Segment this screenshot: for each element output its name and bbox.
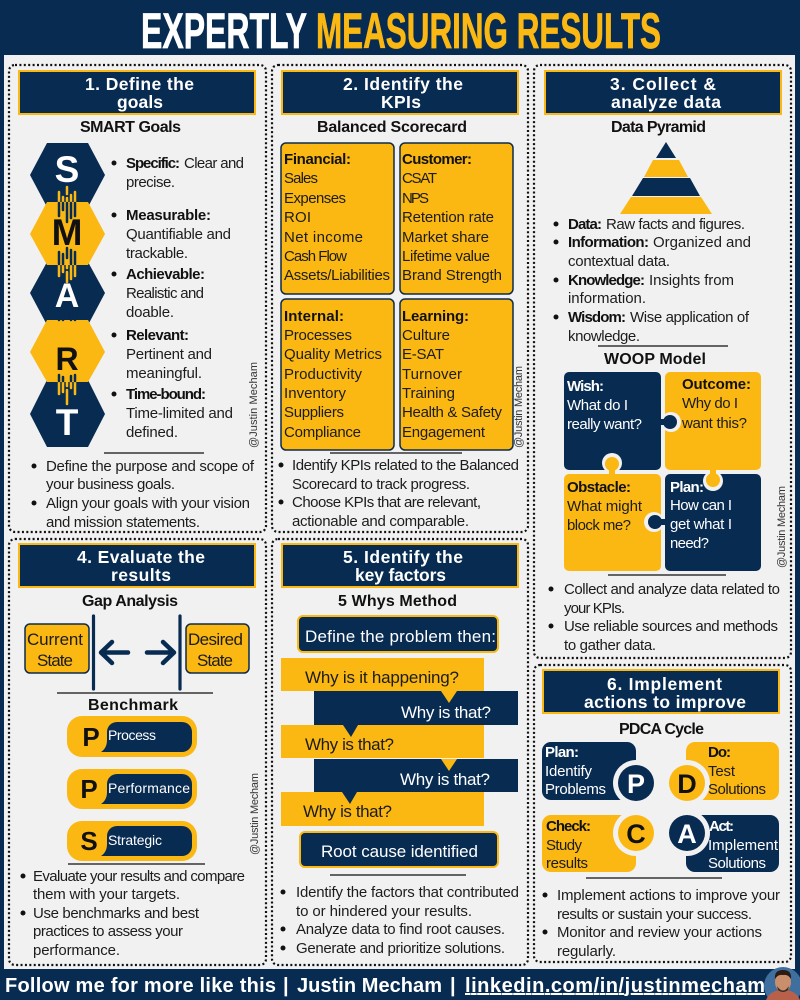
panel: 1. define the goals: [9, 65, 266, 532]
SMART definitions: trackable.: [126, 245, 188, 262]
PDCA: do: Solutions: [708, 781, 766, 798]
heading: identify the KPIs: [282, 71, 518, 114]
bullets: collect and analyze: [548, 581, 780, 654]
bullets: evaluate: practices to assess your: [33, 923, 183, 940]
PDCA: plan: Identify: [545, 763, 592, 780]
bullets: key factors: Identify the factors that contributed: [296, 884, 519, 901]
heading: evaluate the results: results: [111, 565, 171, 585]
pyramid definitions: knowledge.: [568, 328, 640, 345]
PDCA: act: A: [677, 819, 697, 849]
SMART definitions: Measurable:: [126, 207, 211, 224]
benchmark pill: strategic: S: [80, 826, 98, 856]
subheading: PDCA cycle: PDCA Cycle: [619, 721, 704, 738]
SMART definitions: defined.: [126, 424, 178, 441]
define the problem box: Define the problem then:: [305, 627, 496, 646]
panel: 3. collect and analyze data: [534, 65, 791, 658]
title: [141, 3, 661, 59]
heading: implement actions: [543, 670, 779, 713]
panel: 5. identify the key factors: [272, 539, 528, 965]
scorecard: learning: Training: [402, 385, 455, 402]
footer: linkedin.com/in/justinmecham: [465, 975, 765, 997]
scorecard: financial: Sales: [284, 170, 318, 187]
WOOP puzzle: Why do I: [682, 395, 738, 412]
heading: implement actions: 6. Implement: [607, 674, 722, 694]
PDCA: check: results: [546, 855, 588, 872]
5 whys ladder: Why is that?: [303, 802, 392, 821]
PDCA: do: [664, 742, 779, 806]
watermark: @Justin Mecham: [776, 486, 788, 568]
SMART definitions: Relevant:: [126, 327, 189, 344]
footer: |: [283, 975, 289, 997]
scorecard: financial: Expenses: [284, 190, 346, 207]
watermark: @Justin Mecham: [249, 773, 261, 855]
subheading: balanced scorecard: Balanced Scorecard: [317, 119, 467, 136]
arrow: left: [101, 642, 128, 663]
WOOP puzzle: need?: [670, 535, 709, 552]
bullets: implement: regularly.: [557, 943, 616, 960]
footer: Follow me for more like this: [5, 975, 276, 997]
data pyramid chart: [620, 142, 712, 214]
scorecard: customer: Customer:: [402, 151, 472, 168]
subheading: gap analysis: Gap Analysis: [82, 593, 178, 610]
WOOP puzzle: block me?: [567, 517, 631, 534]
define the problem box: [298, 616, 498, 652]
subheading: data pyramid: Data Pyramid: [611, 119, 706, 136]
pyramid definitions: Insights from: [649, 272, 734, 289]
bullets: collect and analyze: Collect and analyze data related to: [564, 581, 780, 598]
PDCA: act: Solutions: [708, 855, 766, 872]
root cause box: Root cause identified: [321, 842, 478, 861]
scorecard: customer: [400, 143, 513, 294]
bullets: implement: Monitor and review your actions: [557, 924, 762, 941]
SMART definitions: Pertinent and: [126, 346, 212, 363]
SMART definitions: Specific:: [126, 155, 180, 172]
puzzle knobs: [602, 412, 723, 532]
bullets: evaluate: Use benchmarks and best: [33, 905, 200, 922]
pyramid definitions: Wisdom:: [568, 309, 626, 326]
heading: key factors: 5. Identify the: [343, 547, 463, 567]
scorecard: learning: Culture: [402, 327, 450, 344]
bullets: evaluate: Evaluate your results and compare: [33, 868, 245, 885]
SMART hexagon chain: T: [56, 402, 79, 443]
WOOP puzzle: really want?: [567, 416, 642, 433]
PDCA: act: Act:: [709, 818, 734, 835]
bullets: identify the KPIs: Choose KPIs that are relevant,: [292, 494, 481, 511]
heading: implement actions: actions to improve: [584, 692, 746, 712]
scorecard: internal: Inventory: [284, 385, 346, 402]
SMART definitions: doable.: [126, 304, 174, 321]
heading: identify the KPIs: KPIs: [381, 92, 421, 112]
scorecard: internal: Processes: [284, 327, 352, 344]
heading: collect and analyze data: analyze data: [611, 92, 721, 112]
5 whys ladder: Why is that?: [401, 703, 491, 722]
scorecard: customer: Retention rate: [402, 209, 494, 226]
heading: collect and analyze data: [545, 71, 781, 114]
footer: Justin Mecham: [297, 975, 442, 997]
bullets: define the goals: and mission statements.: [46, 514, 200, 531]
5 whys ladder: [281, 658, 518, 826]
scorecard: customer: NPS: [402, 190, 429, 207]
scorecard: internal: Internal:: [284, 308, 344, 325]
PDCA: plan: Plan:: [545, 744, 579, 761]
title: EXPERTLY: [141, 3, 307, 59]
scorecard: internal: [281, 299, 394, 450]
watermark: @Justin Mecham: [513, 366, 525, 448]
bullets: implement: [542, 887, 780, 960]
heading: evaluate the results: [19, 544, 255, 587]
bullets: evaluate: them with your targets.: [33, 886, 180, 903]
footer: |: [450, 975, 456, 997]
SMART hexagon chain: M: [52, 212, 82, 253]
PDCA: check: Check:: [546, 818, 591, 835]
gap analysis diagram: State: [37, 651, 73, 670]
scorecard: customer: CSAT: [402, 170, 437, 187]
WOOP puzzle: Outcome:: [682, 376, 751, 393]
SMART definitions: Achievable:: [126, 266, 205, 283]
SMART definitions: Quantifiable and: [126, 226, 231, 243]
subheading: SMART goals: SMART Goals: [80, 119, 181, 136]
bullets: identify the KPIs: [278, 457, 519, 530]
SMART definitions: meaningful.: [126, 365, 202, 382]
benchmark pill: process: P: [82, 722, 100, 752]
PDCA: do: Do:: [708, 744, 731, 761]
scorecard: learning: Health & Safety: [402, 404, 502, 421]
scorecard: learning: [400, 299, 513, 450]
scorecard: financial: Cash Flow: [284, 248, 347, 265]
scorecard: internal: Compliance: [284, 424, 361, 441]
WOOP puzzle: Obstacle:: [567, 479, 631, 496]
heading: define the goals: 1. Define the: [85, 74, 194, 94]
heading: define the goals: [19, 71, 255, 114]
PDCA: plan: P: [627, 769, 645, 799]
subheading: WOOP model: WOOP Model: [604, 351, 706, 368]
pyramid definitions: Data:: [568, 216, 602, 233]
heading: collect and analyze data: 3. Collect &: [610, 74, 716, 94]
heading: key factors: [282, 544, 518, 587]
SMART hexagon chain: A: [55, 277, 79, 315]
WOOP puzzle: What do I: [567, 397, 628, 414]
5 whys ladder: Why is that?: [400, 770, 490, 789]
heading: key factors: key factors: [355, 565, 446, 585]
PDCA: plan: Problems: [545, 781, 606, 798]
WOOP puzzle: Wish:: [567, 378, 604, 395]
SMART definitions: precise.: [126, 174, 175, 191]
panel: 2. identify the KPIs: [272, 65, 528, 532]
benchmark pill: performance: [67, 769, 197, 809]
heading: define the goals: goals: [117, 92, 163, 112]
bullets: implement: results or sustain your success.: [557, 906, 752, 923]
scorecard: learning: Learning:: [402, 308, 469, 325]
scorecard: internal: Productivity: [284, 366, 362, 383]
pyramid definitions: information.: [568, 290, 646, 307]
benchmark pill: strategic: Strategic: [108, 832, 162, 848]
scorecard: customer: Market share: [402, 229, 489, 246]
bullets: identify the KPIs: actionable and comparable.: [292, 513, 469, 530]
subheading: 5 whys method: 5 Whys Method: [338, 593, 457, 610]
bullets: define the goals: Align your goals with your vision: [46, 495, 250, 512]
pyramid definitions: Organized and: [653, 234, 751, 251]
PDCA: check: [542, 810, 659, 872]
avatar: [764, 967, 800, 1000]
PDCA: act: [664, 810, 779, 872]
benchmark pill: performance: P: [80, 774, 98, 804]
benchmark pill: process: [67, 716, 197, 757]
WOOP puzzle: What might: [567, 498, 643, 515]
panel: 4. evaluate the results: [9, 539, 266, 965]
SMART hexagon chain: S: [55, 149, 79, 190]
PDCA: do: Test: [708, 763, 736, 780]
pyramid definitions: [554, 216, 751, 345]
scorecard: learning: Turnover: [402, 366, 462, 383]
SMART hexagon chain: R: [55, 341, 79, 377]
WOOP puzzle: Plan:: [670, 479, 704, 496]
PDCA: check: Study: [546, 837, 582, 854]
heading: identify the KPIs: 2. Identify the: [343, 74, 463, 94]
5 whys ladder: Why is it happening?: [305, 668, 459, 687]
scorecard: internal: Suppliers: [284, 404, 344, 421]
scorecard: financial: Net income: [284, 229, 363, 246]
scorecard: customer: Lifetime value: [402, 248, 490, 265]
bullets: collect and analyze: your KPIs.: [564, 600, 625, 617]
benchmark pill: strategic: [67, 821, 197, 861]
bullets: collect and analyze: to gather data.: [564, 637, 656, 654]
benchmark pill: process: Process: [108, 727, 156, 743]
bullets: identify the KPIs: Identify KPIs related to the Balanced: [292, 457, 519, 474]
bullets: implement: Implement actions to improve your: [557, 887, 780, 904]
pyramid definitions: contextual data.: [568, 253, 670, 270]
bullets: collect and analyze: Use reliable sources and methods: [564, 618, 778, 635]
footer: [5, 975, 765, 997]
scorecard: financial: ROI: [284, 209, 311, 226]
5 whys ladder: Why is that?: [305, 735, 394, 754]
SMART definitions: Realistic and: [126, 285, 204, 302]
PDCA: do: D: [677, 769, 697, 799]
SMART definitions: Time-bound:: [126, 386, 206, 403]
root cause box: [300, 832, 498, 867]
bullets: key factors: to or hindered your results.: [296, 903, 472, 920]
scorecard: internal: Quality Metrics: [284, 346, 382, 363]
bullets: key factors: Analyze data to find root causes.: [296, 921, 505, 938]
pyramid definitions: Raw facts and figures.: [606, 216, 745, 233]
gap analysis diagram: State: [197, 651, 233, 670]
gap analysis diagram: Current: [27, 630, 83, 649]
WOOP puzzle: get what I: [670, 516, 732, 533]
SMART definitions: [112, 155, 244, 441]
panel: 6. implement actions: [534, 665, 791, 962]
scorecard: learning: Engagement: [402, 424, 486, 441]
bullets: key factors: Generate and prioritize solutions.: [296, 940, 505, 957]
watermark: @Justin Mecham: [248, 362, 260, 448]
SMART definitions: Time-limited and: [126, 405, 233, 422]
SMART hexagon chain: [30, 143, 105, 447]
bullets: define the goals: your business goals.: [46, 476, 175, 493]
bullets: key factors: [280, 884, 519, 957]
WOOP puzzle: want this?: [681, 415, 747, 432]
PDCA: act: Implement: [708, 837, 779, 854]
gap analysis diagram: Desired: [188, 630, 243, 649]
PDCA: plan: [542, 742, 659, 806]
scorecard: customer: Brand Strength: [402, 267, 502, 284]
WOOP puzzle: How can I: [670, 497, 732, 514]
pyramid definitions: Wise application of: [630, 309, 750, 326]
bullets: evaluate: [20, 868, 245, 959]
heading: evaluate the results: 4. Evaluate the: [77, 547, 205, 567]
bullets: define the goals: Define the purpose and scope of: [46, 458, 255, 475]
PDCA: check: C: [626, 819, 646, 849]
bullets: define the goals: [32, 458, 255, 531]
arrow: right: [147, 642, 174, 663]
bullets: evaluate: performance.: [33, 942, 120, 959]
subheading: benchmark: Benchmark: [88, 697, 178, 714]
WOOP puzzle: [564, 372, 761, 571]
scorecard: financial: [281, 143, 394, 294]
pyramid definitions: Information:: [568, 234, 649, 251]
bullets: identify the KPIs: Scorecard to track progress.: [292, 476, 470, 493]
benchmark pill: performance: Performance: [108, 780, 190, 796]
SMART definitions: Clear and: [184, 155, 244, 172]
scorecard: learning: E-SAT: [402, 346, 444, 363]
scorecard: financial: Assets/Liabilities: [284, 267, 390, 284]
pyramid definitions: Knowledge:: [568, 272, 645, 289]
gap analysis diagram: [25, 616, 249, 689]
scorecard: financial: Financial:: [284, 151, 351, 168]
